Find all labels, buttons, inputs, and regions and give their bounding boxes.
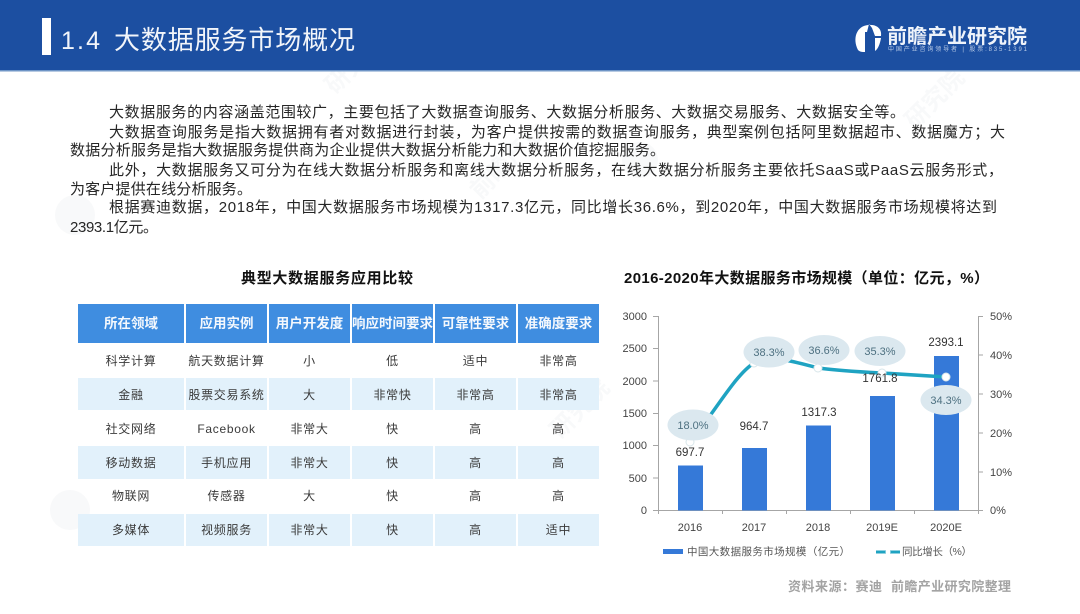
row: 社交网络: 社交网络 (106, 421, 156, 436)
left axis labels: 500 (629, 473, 647, 485)
title: 1.4 (61, 27, 100, 55)
table header row: 可靠性要求 (442, 315, 510, 331)
left axis labels: 3000 (623, 311, 647, 323)
line markers (686, 359, 950, 446)
right axis labels (990, 311, 1012, 517)
x axis labels (678, 522, 962, 534)
row: 科学计算: 小 (303, 354, 316, 368)
source note: 前瞻产业研究院整理 (891, 579, 1011, 594)
row: 移动数据: 移动数据 (106, 455, 156, 470)
title: 大数据服务市场概况 (114, 25, 355, 55)
row: 多媒体: 视频服务 (201, 522, 252, 537)
row: 金融: 非常高 (456, 387, 495, 402)
intro text block (70, 103, 1005, 236)
left axis labels (623, 311, 647, 517)
row: 社交网络: 高 (469, 421, 482, 436)
row: 社交网络: 高 (552, 421, 565, 436)
right axis labels: 20% (990, 428, 1012, 440)
intro text block: 此外，大数据服务又可分为在线大数据分析服务和离线大数据分析服务，在线大数据分析服务主要依托SaaS或PaaS云服务形式， (109, 162, 1003, 179)
logo name: 前瞻产业研究院 (887, 24, 1027, 48)
growth labels: 18.0% (677, 420, 709, 432)
row: 移动数据 (106, 455, 565, 470)
intro text block: 大数据服务的内容涵盖范围较广，主要包括了大数据查询服务、大数据分析服务、大数据交易服务、大数据安全等。 (109, 103, 905, 121)
row: 物联网: 物联网 (112, 489, 150, 503)
row: 移动数据: 非常大 (290, 456, 329, 470)
row: 多媒体: 高 (469, 522, 482, 537)
growth labels: 36.6% (808, 345, 840, 357)
text: 研究院 (544, 374, 615, 444)
table header row: 应用实例 (200, 315, 254, 331)
row: 移动数据: 高 (552, 455, 565, 470)
row: 物联网: 大 (303, 489, 316, 503)
text: 研究 (320, 46, 373, 99)
growth labels: 35.3% (864, 346, 896, 358)
row: 科学计算: 航天数据计算 (188, 353, 265, 368)
left axis labels: 0 (641, 505, 647, 517)
row: 金融: 非常快 (373, 388, 412, 402)
row: 社交网络: Facebook (197, 422, 256, 436)
right axis labels: 0% (990, 505, 1006, 517)
bar value labels: 2393.1 (928, 337, 964, 349)
text: 前瞻产业 (465, 117, 552, 204)
x axis labels: 2016 (678, 522, 702, 534)
row: 多媒体: 适中 (546, 522, 571, 537)
row: 物联网: 高 (469, 488, 482, 503)
source note: 资料来源：赛迪 (788, 579, 882, 594)
table header row (78, 304, 599, 343)
table header row: 准确度要求 (525, 315, 593, 331)
left axis labels: 2500 (623, 343, 647, 355)
x axis labels: 2019E (866, 522, 898, 534)
text: 研究院 (899, 64, 970, 134)
row: 多媒体: 快 (386, 523, 399, 537)
row: 物联网: 快 (386, 489, 399, 503)
title accent bar (42, 18, 51, 55)
right axis labels: 10% (990, 467, 1012, 479)
logo (855, 24, 1028, 53)
right axis labels: 50% (990, 311, 1012, 323)
growth labels (677, 345, 962, 432)
table: comparison of big data service applications (78, 304, 599, 546)
bars (678, 356, 959, 510)
x axis labels: 2018 (806, 522, 830, 534)
growth line (690, 359, 946, 442)
row: 金融: 大 (303, 388, 316, 402)
row: 金融: 金融 (118, 387, 144, 402)
intro text block: 2393.1亿元。 (70, 219, 158, 236)
row: 科学计算: 科学计算 (106, 353, 156, 368)
row: 科学计算: 适中 (463, 353, 488, 368)
row: 多媒体 (112, 522, 571, 537)
axes (653, 316, 983, 514)
row: 科学计算 (106, 353, 578, 368)
table header row: 所在领域 (104, 315, 158, 331)
row: 金融: 股票交易系统 (188, 387, 265, 402)
row: 多媒体: 多媒体 (112, 523, 150, 537)
row: 金融: 非常高 (539, 387, 578, 402)
left axis labels: 1500 (623, 408, 647, 420)
left axis labels: 1000 (623, 440, 647, 452)
logo tagline: 中国产业咨询领导者 | 股票:835-1391 (888, 45, 1028, 53)
left axis labels: 2000 (623, 376, 647, 388)
legend (663, 545, 972, 558)
bar value labels: 964.7 (740, 421, 768, 433)
row: 移动数据: 快 (386, 456, 399, 470)
row: 金融 (118, 387, 578, 402)
row: 多媒体: 非常大 (290, 523, 329, 537)
bar value labels: 697.7 (676, 447, 704, 459)
growth bubbles (668, 335, 972, 440)
intro text block: 大数据查询服务是指大数据拥有者对数据进行封装，为客户提供按需的数据查询服务，典型案例包括阿里数据超市、数据魔方；大 (109, 123, 1005, 141)
table row bands (78, 378, 599, 546)
row: 物联网: 高 (552, 488, 565, 503)
source note (788, 579, 1011, 594)
icon: logo mark (855, 24, 881, 52)
row: 社交网络 (106, 421, 565, 436)
bar value labels: 1761.8 (862, 373, 898, 385)
chart: market size bars and growth line (623, 311, 1012, 558)
row: 物联网 (112, 488, 565, 503)
intro text block: 为客户提供在线分析服务。 (70, 181, 252, 198)
growth labels: 38.3% (753, 347, 785, 359)
bar value labels: 1317.3 (801, 407, 837, 419)
row: 物联网: 传感器 (207, 488, 246, 503)
chart heading: 2016-2020年大数据服务市场规模（单位：亿元，%） (624, 269, 989, 287)
row: 科学计算: 非常高 (539, 353, 578, 368)
row: 社交网络: 快 (386, 422, 399, 436)
right axis labels: 30% (990, 389, 1012, 401)
x axis labels: 2020E (930, 522, 962, 534)
row: 移动数据: 高 (469, 455, 482, 470)
growth labels: 34.3% (930, 395, 962, 407)
table header row: 响应时间要求 (352, 315, 433, 331)
table heading: 典型大数据服务应用比较 (241, 269, 413, 287)
row: 移动数据: 手机应用 (201, 455, 252, 470)
intro text block: 根据赛迪数据，2018年，中国大数据服务市场规模为1317.3亿元，同比增长36.6%，到2020年，中国大数据服务市场规模将达到 (109, 199, 997, 216)
row: 科学计算: 低 (386, 354, 399, 368)
row: 社交网络: 非常大 (290, 422, 329, 436)
table header row: 用户开发度 (276, 315, 344, 331)
legend: 同比增长（%） (902, 545, 972, 558)
bar value labels (676, 337, 964, 459)
x axis labels: 2017 (742, 522, 766, 534)
right axis labels: 40% (990, 350, 1012, 362)
header band (0, 0, 1080, 72)
intro text block: 数据分析服务是指大数据服务提供商为企业提供大数据分析能力和大数据价值挖掘服务。 (70, 141, 665, 159)
legend: 中国大数据服务市场规模（亿元） (687, 545, 850, 558)
